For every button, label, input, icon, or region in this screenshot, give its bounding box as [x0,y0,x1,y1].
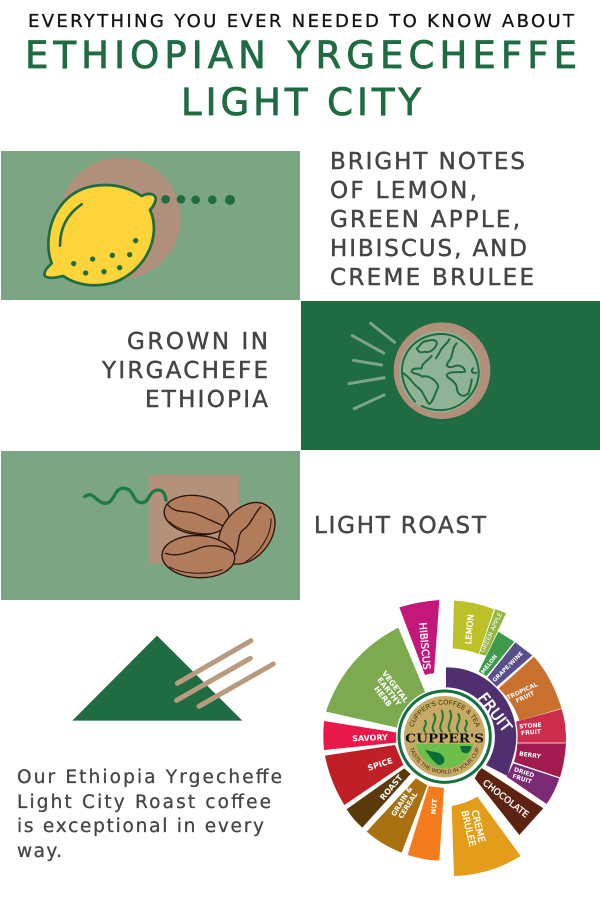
text: description paragraph [17,767,282,862]
icon: lemon [44,158,235,285]
segment labels: HERB [372,684,394,709]
segment labels: SPICE [366,756,394,773]
segment labels: SAVORY [352,733,388,743]
segment labels: VEGETAL [380,669,411,705]
text: flavour notes [330,149,534,291]
segment labels [352,611,543,848]
text: flavour notes: HIBISCUS, AND [330,236,527,262]
segments [323,600,566,876]
logo: Cupper's: CUPPER'S [405,732,484,746]
text: description paragraph: Light City Roast coffee [17,792,271,813]
segment labels: LEMON [463,614,476,645]
segment labels: CEREAL [397,790,420,820]
title: ETHIOPIAN YRGECHEFFE [25,34,577,77]
segment labels: ROAST [378,773,405,802]
segment labels: FRUIT [521,728,542,737]
segment labels: BERRY [519,750,542,761]
segment labels: CREME [469,809,487,844]
segment labels: GRAIN & [390,785,414,818]
segment labels: STONE [519,722,542,731]
text: description paragraph: Our Ethiopia Yrgecheffe [17,767,282,788]
logo: Cupper's: CUPPER'S COFFEE & TEA [410,700,480,728]
icon: coffee beans with wave [85,475,287,580]
segment labels: FRUIT [515,690,537,705]
segment labels: MELON [480,654,499,675]
text: flavour notes: GREEN APPLE, [330,207,520,233]
logo: Cupper's: TASTE THE WORLD IN YOUR CUP [410,747,478,774]
text: origin: YIRGACHEFE [101,358,268,384]
panel: lemon flavour [1,151,300,300]
segment labels: DRIED [513,766,535,779]
text: origin: GROWN IN [127,329,268,355]
panel: origin [301,301,600,450]
title: LIGHT CITY [181,81,421,124]
text: description paragraph: way. [17,841,62,862]
text: roast level: LIGHT ROAST [314,513,487,539]
segment labels: NUT [430,798,439,815]
icon: triangle with stripes [72,636,273,721]
segment labels: EARTHY [375,675,403,708]
text: origin: ETHIOPIA [145,387,268,413]
chart: coffee flavour wheel [323,600,566,876]
icon: globe with rays [349,322,490,419]
title [25,34,577,124]
segment labels: FRUIT [474,689,516,736]
text: origin [101,329,268,413]
panel: roast [1,451,300,600]
logo: Cupper's [396,690,492,784]
segment labels: BRULEE [458,809,477,848]
segment labels: CHOCOLATE [480,778,530,821]
eyebrow heading: EVERYTHING YOU EVER NEEDED TO KNOW ABOUT [28,11,575,32]
text: flavour notes: BRIGHT NOTES [330,149,525,175]
segment labels: FRUIT [511,773,533,786]
segment labels: GRAPE/WINE [492,651,525,684]
segment labels: GREEN APPLE [479,611,504,654]
segment labels: HIBISCUS [416,622,431,670]
text: flavour notes: OF LEMON, [330,178,477,204]
text: description paragraph: is exceptional in every [17,816,264,837]
segment labels: TROPICAL [506,681,539,702]
text: flavour notes: CREME BRULEE [330,265,534,291]
